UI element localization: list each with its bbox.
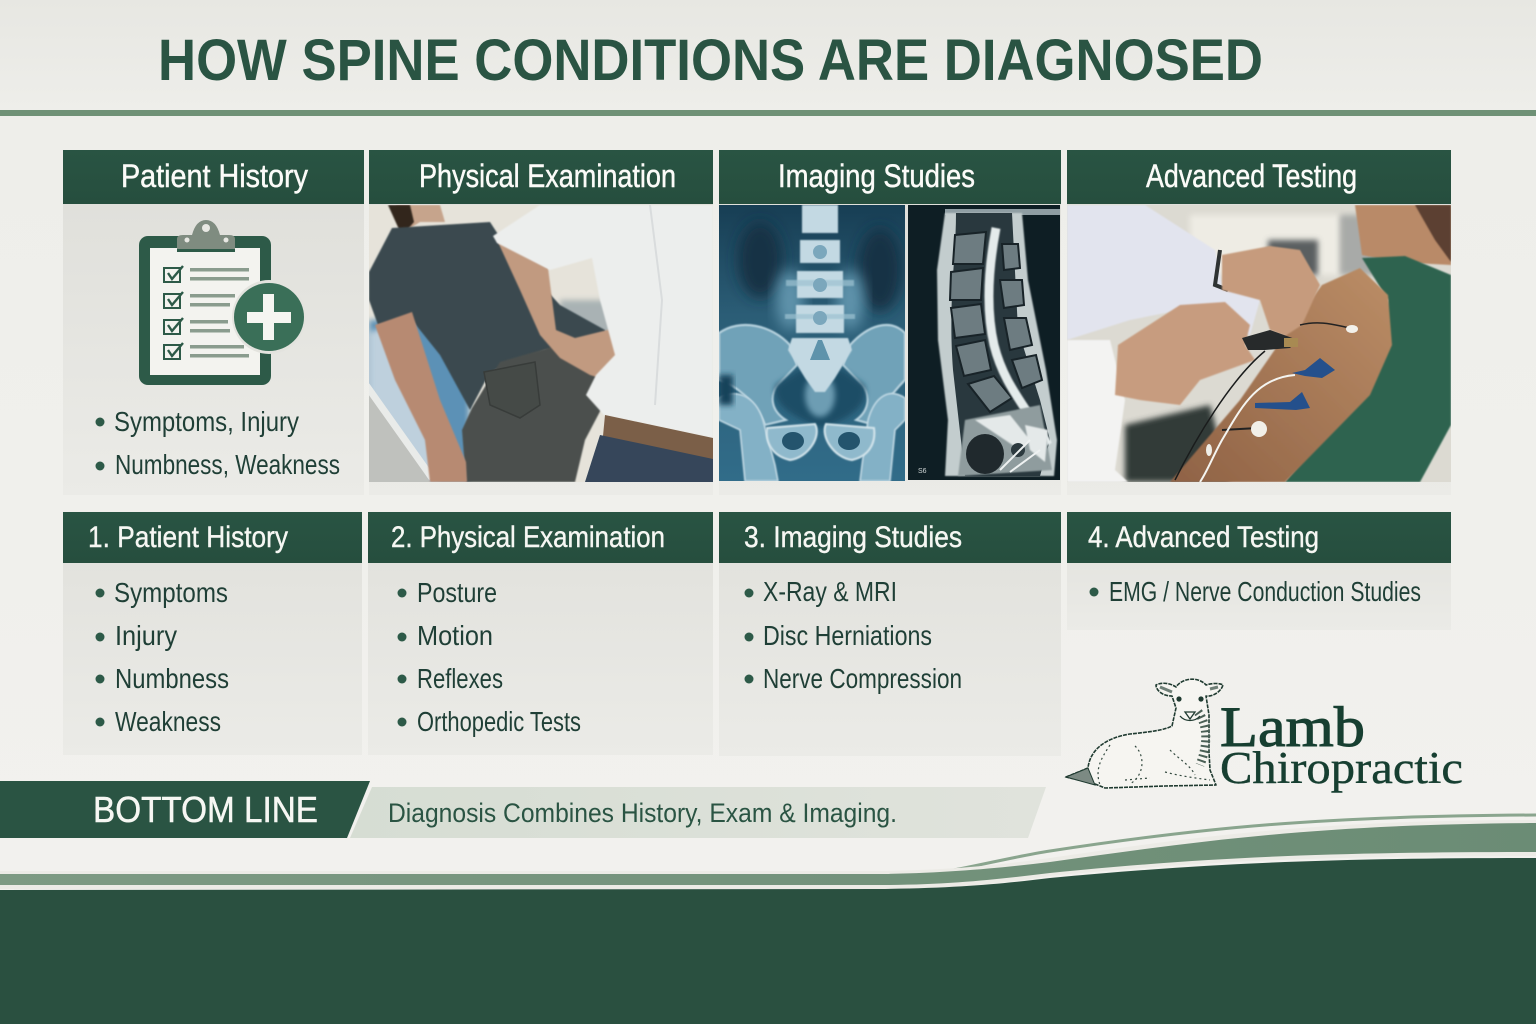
card: 3. imaging studies [719, 512, 1061, 756]
icon: clipboard with medical cross [139, 220, 306, 385]
list: history summary: Numbness, Weakness [115, 449, 340, 480]
list: history summary [96, 406, 340, 480]
list: patient history items: Numbness [115, 663, 229, 694]
list: imaging studies items: X-Ray & MRI [763, 576, 897, 607]
list: patient history items: Symptoms [114, 577, 228, 608]
heading: physical examination: Physical Examination [419, 158, 676, 194]
text: Lamb: Lamb [1220, 696, 1365, 759]
list: patient history items: Weakness [115, 706, 221, 737]
bottom line banner [0, 781, 1046, 838]
list: imaging studies items [744, 576, 962, 694]
list: imaging studies items: Nerve Compression [763, 663, 962, 694]
list: imaging studies items: Disc Herniations [763, 620, 932, 651]
text: Chiropractic: Chiropractic [1220, 743, 1463, 793]
heading: 2. physical examination: 2. Physical Examination [391, 521, 665, 554]
image: sagittal spine MRI: S6 [918, 468, 927, 475]
list: physical examination items: Motion [417, 620, 493, 651]
list: physical examination items [398, 577, 581, 737]
footer wave band [0, 815, 1536, 1024]
title: HOW SPINE CONDITIONS ARE DIAGNOSED [158, 28, 1263, 93]
heading: 4. advanced testing: 4. Advanced Testing [1088, 521, 1319, 554]
heading: 3. imaging studies: 3. Imaging Studies [744, 521, 962, 554]
list: patient history items [96, 577, 229, 737]
photo: doctor examining patient's back [366, 205, 713, 482]
panel: physical examination [366, 150, 713, 495]
panel: patient history [63, 150, 364, 495]
heading: imaging studies: Imaging Studies [778, 158, 975, 194]
panel: imaging studies [719, 150, 1061, 495]
heading: patient history: Patient History [121, 158, 308, 194]
list: physical examination items: Reflexes [417, 663, 503, 694]
list: physical examination items: Orthopedic Tests [417, 706, 581, 737]
card: 2. physical examination [368, 512, 713, 755]
photo: EMG electrode test on arm [1067, 205, 1451, 482]
list: history summary: Symptoms, Injury [114, 406, 299, 437]
card: 1. patient history [63, 512, 362, 755]
heading: advanced testing: Advanced Testing [1146, 158, 1357, 194]
list: physical examination items: Posture [417, 577, 497, 608]
icon: resting lamb [1066, 679, 1223, 788]
label: bottom line: BOTTOM LINE [93, 789, 318, 830]
title rule [0, 110, 1536, 116]
logo: Lamb Chiropractic [1066, 679, 1463, 793]
image: lumbar x-ray [719, 205, 905, 481]
text: bottom line message: Diagnosis Combines History, Exam & Imaging. [388, 798, 897, 828]
panel: advanced testing [1067, 150, 1451, 495]
heading: 1. patient history: 1. Patient History [88, 521, 288, 554]
list: patient history items: Injury [115, 620, 177, 651]
card: 4. advanced testing [1067, 512, 1451, 630]
list: advanced testing item: EMG / Nerve Conduction Studies [1109, 576, 1421, 607]
image: sagittal spine MRI [908, 205, 1060, 480]
